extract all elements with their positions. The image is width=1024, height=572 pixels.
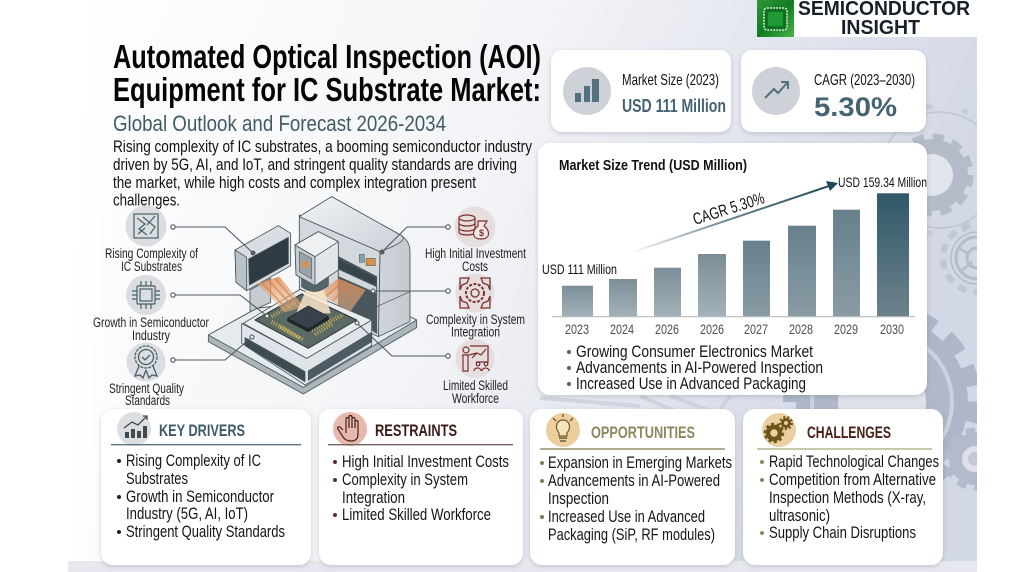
callout: semiconductor growth — [93, 275, 209, 343]
CAGR arrow — [630, 181, 838, 253]
chart title: Market Size Trend (USD Million) — [559, 157, 747, 174]
trend bullets: Growing Consumer Electronics Market — [576, 342, 813, 361]
intro paragraph: challenges. — [113, 190, 180, 210]
callout: system integration: Complexity in System — [426, 312, 525, 327]
title: Equipment for IC Substrate Market: — [113, 72, 541, 109]
bullet list: Supply Chain Disruptions — [769, 523, 916, 542]
logo wordmark — [798, 0, 971, 39]
stage — [242, 289, 372, 385]
subtitle: Global Outlook and Forecast 2026-2034 — [113, 111, 446, 136]
bar chart: 2029 — [834, 321, 858, 337]
bullet list: Inspection — [548, 489, 609, 508]
CAGR text: 5.30% — [814, 92, 897, 122]
icon: stop hand — [333, 412, 367, 446]
callout: quality standards: Stringent Quality — [109, 381, 184, 396]
callout: investment costs: Costs — [462, 259, 488, 274]
panel: restraints — [319, 409, 523, 565]
CAGR text: CAGR (2023–2030) — [814, 72, 915, 89]
icon: gears — [762, 413, 796, 447]
bottom band — [68, 561, 977, 572]
bullet list: Advancements in AI-Powered — [548, 471, 720, 490]
trend bullets: Increased Use in Advanced Packaging — [576, 374, 806, 393]
panel: market size trend chart — [538, 143, 927, 395]
bullet list: ultrasonic) — [769, 506, 830, 525]
orange inspection beams — [257, 277, 366, 313]
intro paragraph: the market, while high costs and complex integration present — [113, 173, 476, 192]
bullet list: High Initial Investment Costs — [342, 452, 509, 471]
gear behind chart — [895, 138, 969, 212]
large gear — [792, 312, 972, 492]
heading: RESTRAINTS — [375, 422, 457, 440]
bullet list: Increased Use in Advanced — [548, 507, 705, 526]
bullet list: Packaging (SiP, RF modules) — [548, 525, 715, 544]
market size text: USD 111 Million — [622, 95, 726, 116]
outline gear — [888, 104, 977, 295]
small gear — [946, 428, 977, 490]
bullet list: Inspection Methods (X-ray, — [769, 488, 926, 507]
callout: investment costs — [425, 206, 526, 274]
end value label: USD 159.34 Million — [838, 175, 927, 190]
panel: CAGR — [741, 50, 926, 132]
intro paragraph — [113, 137, 532, 210]
intro paragraph: Rising complexity of IC substrates, a booming semiconductor industry — [113, 137, 532, 156]
bullet list: Complexity in System — [342, 470, 468, 489]
bar chart: 2026 — [655, 321, 679, 337]
intro paragraph: driven by 5G, AI, and IoT, and stringent quality standards are driving — [113, 155, 517, 174]
heading: CHALLENGES — [807, 424, 891, 442]
connector lines — [171, 225, 450, 362]
icon: light bulb — [546, 413, 580, 447]
callout: rising complexity — [105, 206, 198, 274]
bar chart: 2028 — [789, 321, 813, 337]
callout: skilled workforce: Workforce — [452, 391, 499, 406]
callout: skilled workforce: Limited Skilled — [443, 378, 508, 393]
callout: quality standards: Standards — [125, 393, 170, 408]
callout: investment costs: $ — [479, 228, 484, 238]
bar chart — [552, 193, 915, 337]
bullet list: Industry (5G, AI, IoT) — [126, 504, 248, 523]
camera head — [295, 232, 338, 291]
bullet list — [333, 452, 509, 524]
bar chart: 2026 — [700, 321, 724, 337]
market size text — [622, 72, 726, 116]
illustration: AOI inspection machine — [208, 197, 417, 394]
heading: OPPORTUNITIES — [591, 424, 695, 442]
bullet list — [540, 453, 732, 544]
bullet list: Substrates — [126, 469, 188, 488]
faint background strokes — [540, 395, 732, 409]
bullet list: Growth in Semiconductor — [126, 487, 274, 506]
substrate board — [255, 294, 357, 348]
icon: trend arrow — [752, 67, 800, 115]
icon: green chip logo — [757, 0, 794, 37]
icon: growth chart — [117, 412, 151, 446]
title: Automated Optical Inspection (AOI) — [113, 39, 541, 76]
bar chart: 2023 — [565, 321, 589, 337]
panel: challenges — [743, 409, 943, 565]
heading: KEY DRIVERS — [159, 422, 245, 440]
logo: Semiconductor Insight — [757, 0, 977, 39]
panel: opportunities — [530, 409, 735, 565]
market size text: Market Size (2023) — [622, 72, 719, 89]
bullet list — [760, 452, 939, 542]
title — [113, 39, 541, 109]
bar chart: 2027 — [744, 321, 768, 337]
machine base plate — [208, 295, 417, 394]
trend bullets: Advancements in AI-Powered Inspection — [576, 358, 823, 377]
CAGR text — [814, 72, 915, 122]
callout: semiconductor growth: Industry — [132, 328, 170, 343]
callout: quality standards — [109, 342, 184, 408]
start value label: USD 111 Million — [542, 262, 617, 277]
machine tower — [299, 197, 410, 337]
callout: skilled workforce — [443, 339, 508, 406]
callout: investment costs: High Initial Investment — [425, 246, 526, 261]
panel: market size — [551, 50, 731, 132]
panel: key drivers — [101, 409, 311, 565]
background gears — [540, 106, 1011, 492]
bar chart: 2024 — [610, 321, 634, 337]
trend bullets — [567, 342, 823, 393]
bar chart: 2030 — [880, 321, 904, 337]
callout: rising complexity: Rising Complexity of — [105, 246, 198, 261]
bullet list: Limited Skilled Workforce — [342, 505, 491, 524]
bullet list: Competition from Alternative — [769, 470, 936, 489]
icon: bar chart — [563, 67, 611, 115]
bullet list: Stringent Quality Standards — [126, 522, 285, 541]
bullet list: Expansion in Emerging Markets — [548, 453, 732, 472]
bullet list: Rising Complexity of IC — [126, 451, 261, 470]
callout: semiconductor growth: Growth in Semiconductor — [93, 315, 209, 330]
bullet list: Rapid Technological Changes — [769, 452, 939, 471]
semiconductor chip — [288, 306, 328, 332]
callout: system integration: Integration — [451, 324, 500, 340]
bullet list: Integration — [342, 488, 405, 507]
bullet list — [117, 451, 285, 541]
callout: system integration — [426, 274, 525, 340]
logo wordmark: INSIGHT — [841, 17, 920, 39]
monitor — [235, 226, 291, 312]
CAGR arrow label: CAGR 5.30% — [691, 189, 767, 229]
callout: rising complexity: IC Substrates — [121, 259, 182, 274]
